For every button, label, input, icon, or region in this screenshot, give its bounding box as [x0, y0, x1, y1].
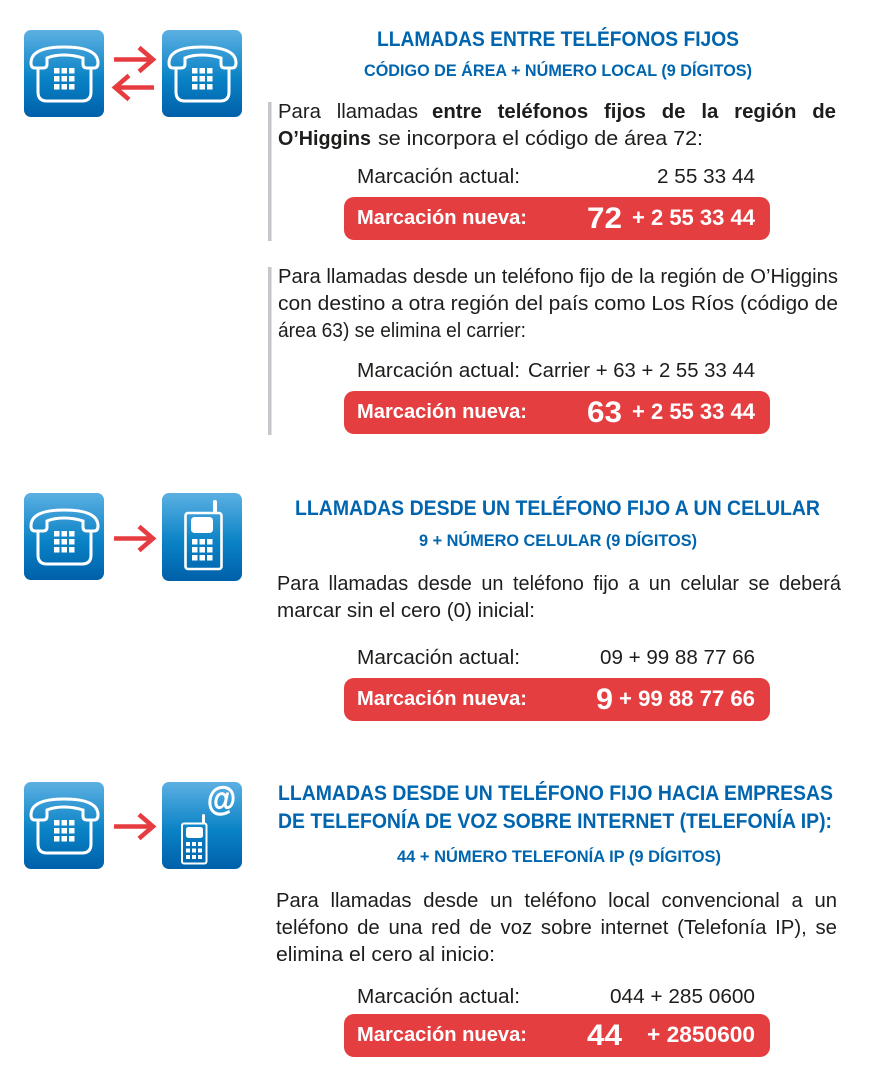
new dialing callout: Marcación nueva:	[357, 401, 527, 423]
icon: mobile phone	[162, 493, 242, 581]
new dialing callout: 63	[587, 396, 622, 429]
new dialing callout: + 2 55 33 44	[632, 399, 756, 424]
current dialing: 044 + 285 0600	[610, 986, 755, 1008]
current dialing	[357, 647, 755, 669]
current dialing: Marcación actual:	[357, 647, 520, 669]
text block: within region: O’Higgins	[278, 128, 371, 150]
text block: Para llamadas desde un teléfono fijo a un celular se deberá	[277, 573, 842, 595]
text block: to other region	[278, 266, 838, 342]
new dialing callout: + 2 55 33 44	[632, 205, 756, 230]
icon: mobile phone with at sign: @	[207, 780, 236, 817]
new dialing callout	[344, 391, 770, 434]
icon: landline telephone	[24, 30, 104, 117]
icon: two-way arrows	[114, 48, 154, 100]
heading: DE TELEFONÍA DE VOZ SOBRE INTERNET (TELEFONÍA IP):	[278, 810, 832, 833]
current dialing: Marcación actual:	[357, 360, 520, 382]
icon: landline telephone destination	[162, 30, 242, 117]
text block: within region: se incorpora el código de área 72:	[378, 128, 703, 150]
text block	[277, 573, 842, 622]
subheading: 9 + NÚMERO CELULAR (9 DÍGITOS)	[419, 531, 697, 550]
text block: to other region: con destino a otra región del país como Los Ríos (código de	[278, 293, 838, 315]
heading: LLAMADAS ENTRE TELÉFONOS FIJOS	[377, 28, 739, 51]
new dialing callout: + 2850600	[647, 1022, 755, 1047]
new dialing callout: 44	[587, 1019, 622, 1052]
current dialing	[357, 360, 755, 382]
current dialing: Marcación actual:	[357, 986, 520, 1008]
text block: within region: Para llamadas	[278, 101, 418, 123]
heading	[278, 782, 833, 833]
new dialing callout	[344, 1014, 770, 1057]
current dialing: Carrier + 63 + 2 55 33 44	[528, 360, 755, 382]
current dialing	[357, 986, 755, 1008]
subheading: CÓDIGO DE ÁREA + NÚMERO LOCAL (9 DÍGITOS)	[364, 61, 752, 80]
icon: landline telephone	[24, 782, 104, 869]
new dialing callout: + 99 88 77 66	[619, 686, 755, 711]
icon: mobile phone with at sign	[162, 780, 242, 869]
new dialing callout	[344, 197, 770, 240]
icon: arrow	[114, 526, 153, 550]
section: calls between landlines	[24, 28, 838, 435]
new dialing callout: 9	[596, 683, 613, 716]
subheading: 44 + NÚMERO TELEFONÍA IP (9 DÍGITOS)	[397, 847, 721, 866]
current dialing: 09 + 99 88 77 66	[600, 647, 755, 669]
text block: teléfono de una red de voz sobre internet (Telefonía IP), se	[276, 917, 837, 939]
side bar	[268, 102, 272, 241]
heading: LLAMADAS DESDE UN TELÉFONO FIJO HACIA EMPRESAS	[278, 782, 833, 805]
new dialing callout: Marcación nueva:	[357, 1024, 527, 1046]
side bar	[268, 267, 272, 435]
new dialing callout: 72	[587, 202, 622, 235]
text block: within region	[278, 101, 836, 150]
new dialing callout	[344, 678, 770, 721]
text block	[276, 890, 837, 966]
icon: arrow	[114, 814, 153, 838]
current dialing: 2 55 33 44	[657, 166, 755, 188]
new dialing callout: Marcación nueva:	[357, 207, 527, 229]
text block: marcar sin el cero (0) inicial:	[277, 600, 535, 622]
section: landline to IP telephony	[24, 780, 837, 1057]
current dialing	[357, 166, 755, 188]
text block: within region: entre teléfonos fijos de la región de	[432, 101, 836, 123]
icon: landline telephone	[24, 493, 104, 580]
new dialing callout: Marcación nueva:	[357, 688, 527, 710]
heading: LLAMADAS DESDE UN TELÉFONO FIJO A UN CELULAR	[295, 497, 820, 520]
current dialing: Marcación actual:	[357, 166, 520, 188]
text block: to other region: Para llamadas desde un teléfono fijo de la región de O’Higgins	[278, 266, 838, 288]
text block: Para llamadas desde un teléfono local convencional a un	[276, 890, 837, 912]
text block: to other region: área 63) se elimina el carrier:	[278, 320, 526, 342]
section: landline to mobile	[24, 493, 842, 721]
text block: elimina el cero al inicio:	[276, 944, 495, 966]
